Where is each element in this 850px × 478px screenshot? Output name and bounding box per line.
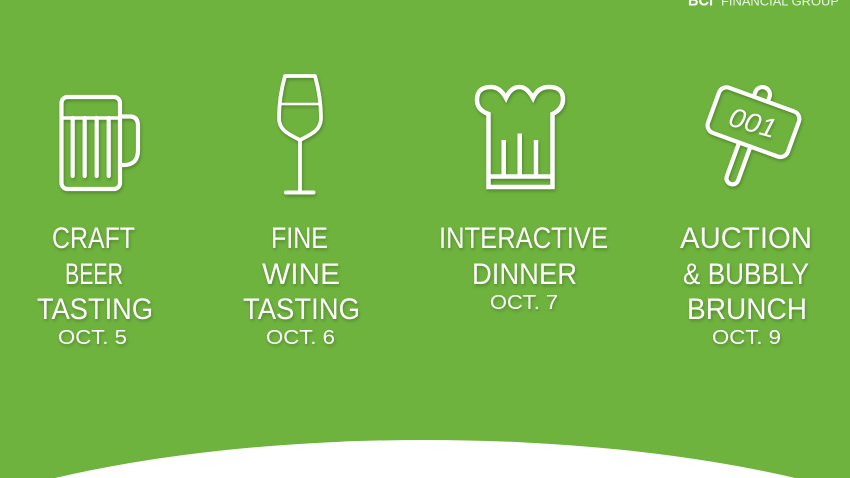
column: fine wine tasting: OCT. 6 <box>266 327 335 349</box>
icon: auction paddle <box>691 73 806 199</box>
logo text cropped at top <box>688 0 839 10</box>
column: interactive dinner <box>439 222 608 314</box>
column: auction and bubbly brunch <box>680 222 812 349</box>
column: craft beer tasting: TASTING <box>37 293 153 326</box>
column: craft beer tasting: CRAFT <box>52 222 135 255</box>
icon: wine glass <box>279 76 321 192</box>
icon: chef hat <box>477 87 563 187</box>
column: auction and bubbly brunch: BRUNCH <box>687 293 807 326</box>
column: auction and bubbly brunch: AUCTION <box>680 222 812 255</box>
white curved footer <box>55 440 795 478</box>
column: fine wine tasting: FINE <box>271 222 328 255</box>
column: interactive dinner: DINNER <box>472 258 577 291</box>
column: fine wine tasting <box>243 222 360 349</box>
column: auction and bubbly brunch: OCT. 9 <box>712 327 781 349</box>
column: fine wine tasting: WINE <box>262 258 340 291</box>
column: craft beer tasting: OCT. 5 <box>58 327 127 349</box>
column: auction and bubbly brunch: & BUBBLY <box>683 258 809 291</box>
paddle number: 001 <box>726 102 780 144</box>
icon: beer mug <box>62 97 138 189</box>
column: fine wine tasting: TASTING <box>243 293 360 326</box>
column: craft beer tasting: BEER <box>65 258 123 291</box>
column: interactive dinner: INTERACTIVE <box>439 222 608 255</box>
column: interactive dinner: OCT. 7 <box>490 292 558 314</box>
column: craft beer tasting <box>37 222 153 349</box>
